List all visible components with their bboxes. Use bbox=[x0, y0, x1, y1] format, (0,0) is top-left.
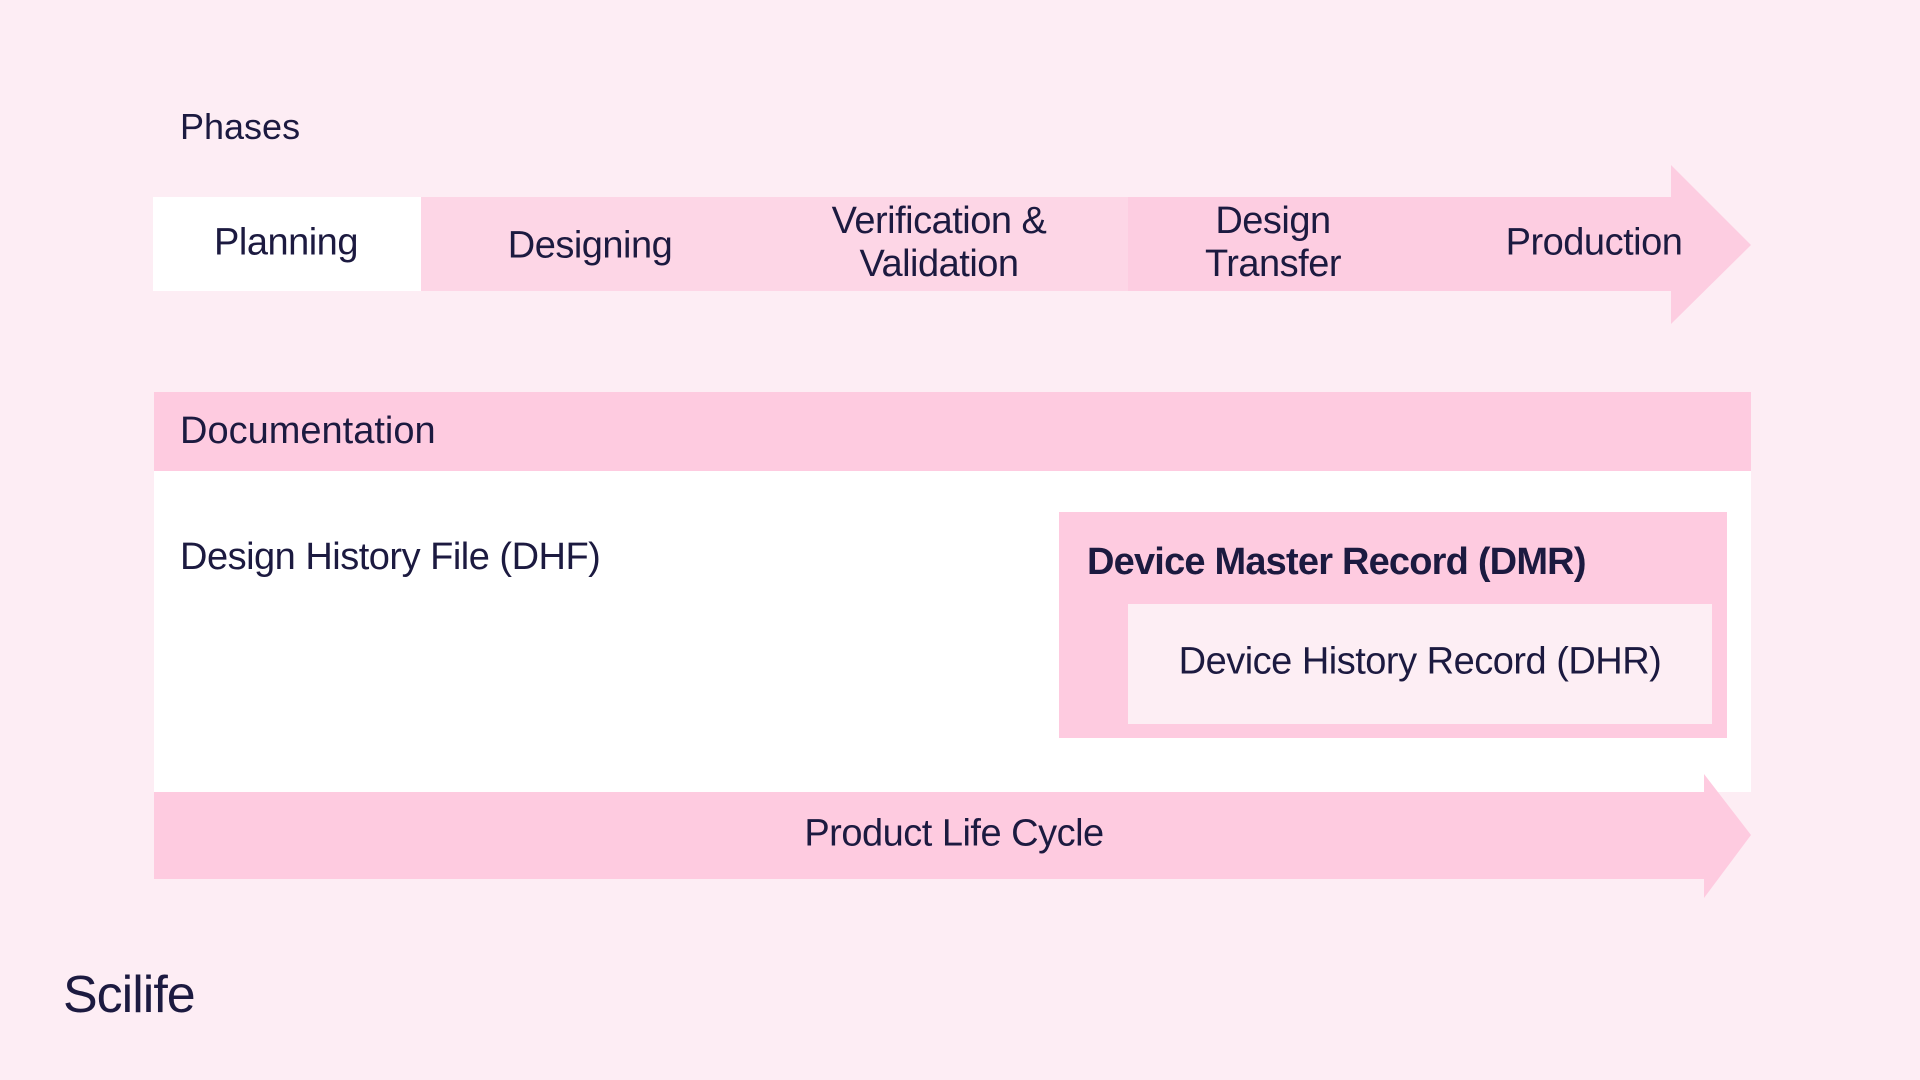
logo: scilife: Scilife bbox=[63, 966, 195, 1024]
phase: production: Production bbox=[1506, 222, 1682, 264]
arrow: product life cycle: Product Life Cycle bbox=[804, 812, 1104, 854]
phase: design transfer bbox=[1205, 200, 1341, 285]
heading: DMR: Device Master Record (DMR) bbox=[1087, 541, 1586, 583]
phase: designing: Designing bbox=[508, 224, 672, 266]
heading: phases: Phases bbox=[180, 106, 300, 147]
phases arrow bbox=[153, 165, 1751, 324]
box: device history record: Device History Record (DHR) bbox=[1179, 640, 1661, 682]
text: design history file: Design History File (DHF) bbox=[180, 536, 600, 578]
documentation header: Documentation bbox=[180, 410, 436, 452]
documentation header bbox=[154, 392, 1751, 471]
arrow: product life cycle bbox=[154, 774, 1751, 898]
phase: verification & validation bbox=[832, 200, 1046, 285]
panel: documentation bbox=[154, 392, 1751, 792]
phase: design transfer: Transfer bbox=[1205, 243, 1341, 285]
box: device master record bbox=[1059, 512, 1727, 738]
phase: verification & validation: Verification & bbox=[832, 200, 1046, 242]
phase: design transfer: Design bbox=[1215, 200, 1331, 242]
phase: planning: Planning bbox=[214, 222, 358, 264]
phase: verification & validation: Validation bbox=[859, 243, 1019, 285]
box: device history record bbox=[1128, 604, 1712, 724]
